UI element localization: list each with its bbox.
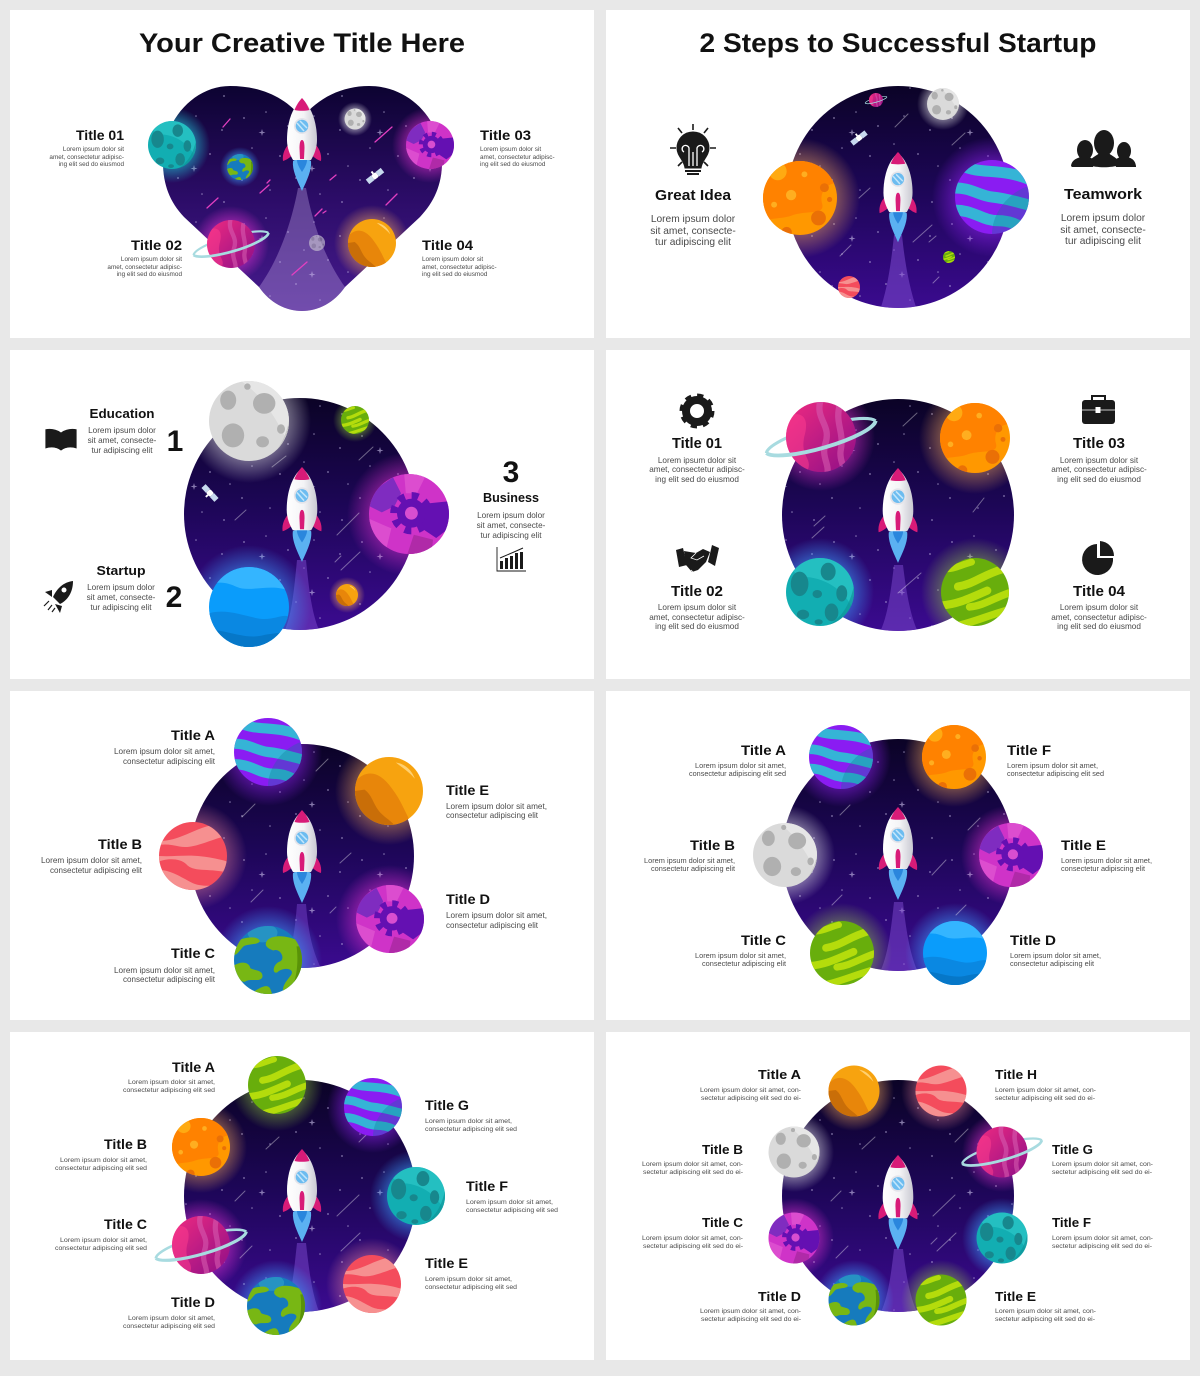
text: Title F: Title F <box>1007 742 1051 758</box>
text: Title B: Title B <box>98 836 142 852</box>
rocket <box>283 1149 321 1242</box>
text: Title 04: ing elit sed do eiusmod <box>1057 622 1141 631</box>
text: Title C: Lorem ipsum dolor sit amet, <box>695 953 786 960</box>
text: Title B: consectetur adipiscing elit <box>651 866 735 873</box>
text: Title 04 <box>422 237 497 278</box>
text: Title E: sectetur adipiscing elit sed do ei- <box>995 1316 1095 1323</box>
text: Title B: sectetur adipiscing elit sed do ei- <box>643 1169 743 1176</box>
panel: 6 titles <box>606 691 1190 1020</box>
planet: small amber <box>336 584 358 606</box>
panel: 3 steps Education Startup Business <box>10 350 594 679</box>
text: Title G <box>1052 1142 1153 1176</box>
text: Education: Education <box>90 406 155 421</box>
planet: red <box>343 1255 401 1314</box>
text: Title D: Title D <box>171 1295 215 1310</box>
icon: team <box>1071 130 1136 167</box>
text: Title 04 <box>1051 583 1147 631</box>
text: Title 02: amet, consectetur adipisc- <box>649 613 745 622</box>
text: Title 03: Lorem ipsum dolor sit <box>480 146 541 153</box>
planet: orange <box>763 161 837 237</box>
text: Title D: sectetur adipiscing elit sed do ei- <box>701 1316 801 1323</box>
text: Great Idea: Great Idea <box>655 187 732 204</box>
planet: moon <box>753 823 817 887</box>
text: Title A <box>123 1060 215 1094</box>
planet: gear <box>369 474 449 554</box>
text: Title D: Title D <box>446 891 490 907</box>
text: Great Idea: sit amet, consecte- <box>650 226 736 237</box>
text: Teamwork: sit amet, consecte- <box>1060 225 1146 236</box>
circular space scene <box>184 398 409 630</box>
planet: small ringed <box>865 92 887 108</box>
planet: teal <box>148 121 196 169</box>
text: Title 03: ing elit sed do eiusmod <box>480 161 546 168</box>
number 2: 2 <box>166 581 182 614</box>
text: Title D: Title D <box>1010 932 1056 948</box>
text: Title D <box>1010 932 1101 968</box>
planet: gear <box>979 823 1043 887</box>
number 1: 1 <box>167 425 183 458</box>
text: Title F: Lorem ipsum dolor sit amet, <box>466 1199 553 1206</box>
text: Title 01: Title 01 <box>672 435 722 452</box>
planet: moon <box>344 108 366 130</box>
text: Title 02: amet, consectetur adipisc- <box>107 264 182 271</box>
circular space scene <box>782 1080 1014 1312</box>
text: Title G: sectetur adipiscing elit sed do ei- <box>1052 1169 1152 1176</box>
text: Teamwork <box>1060 186 1146 247</box>
planet: teal <box>786 558 854 626</box>
planet: small green <box>943 251 955 263</box>
panel: 4 titles with icons <box>606 350 1190 679</box>
text: Title A: Lorem ipsum dolor sit amet, <box>695 763 786 770</box>
rocket <box>282 467 322 562</box>
text: Title 03: amet, consectetur adipisc- <box>480 154 555 161</box>
text: Title 01: amet, consectetur adipisc- <box>49 154 124 161</box>
text: Title A <box>700 1067 802 1102</box>
planet: orange <box>922 725 986 791</box>
circular space scene <box>184 1080 412 1312</box>
text: Title A: sectetur adipiscing elit sed do ei- <box>701 1095 801 1102</box>
text: Title 03: Title 03 <box>1073 435 1125 452</box>
planet: moon <box>209 381 289 461</box>
text: Title 04: ing elit sed do eiusmod <box>422 271 488 278</box>
icon: gear <box>682 396 712 426</box>
text: Title D: Lorem ipsum dolor sit amet, <box>446 911 547 920</box>
panel: 5 titles <box>10 691 594 1020</box>
text: Title E <box>1061 837 1152 873</box>
planet: earth <box>227 153 253 180</box>
text: Title 04: Title 04 <box>1073 583 1126 600</box>
rocket <box>283 98 321 191</box>
title: Your Creative Title Here <box>139 28 465 58</box>
text: Business: Lorem ipsum dolor <box>477 511 545 520</box>
text: Title F <box>1007 742 1104 778</box>
text: Title B <box>642 1142 743 1176</box>
text: Title E <box>995 1289 1096 1323</box>
text: Title 03: amet, consectetur adipisc- <box>1051 465 1147 474</box>
text: Startup: Startup <box>96 563 146 578</box>
text: Great Idea: Lorem ipsum dolor <box>651 214 736 225</box>
text: Title A: Lorem ipsum dolor sit amet, con- <box>700 1087 801 1094</box>
icon: satellite <box>364 166 384 184</box>
text: Title A: Title A <box>758 1067 802 1082</box>
planet: ringed pink <box>766 398 876 476</box>
text: Title 02: ing elit sed do eiusmod <box>655 622 739 631</box>
text: Title G: Title G <box>1052 1142 1093 1157</box>
text: Title 04: amet, consectetur adipisc- <box>422 264 497 271</box>
text: Title C: consectetur adipiscing elit <box>702 961 786 968</box>
icon: handshake <box>676 545 719 573</box>
text: Title 01: Title 01 <box>76 127 124 143</box>
text: Title H <box>995 1067 1096 1102</box>
planet: gear <box>406 121 454 169</box>
text: Title E: Title E <box>1061 837 1106 853</box>
text: Great Idea: tur adipiscing elit <box>655 237 731 248</box>
text: Title F <box>466 1179 558 1214</box>
text: Title B: Title B <box>690 837 735 853</box>
text: Title C: consectetur adipiscing elit <box>123 975 216 984</box>
text: Title C: Title C <box>741 932 786 948</box>
panel: 7 titles <box>10 1032 594 1360</box>
icon: rocket <box>44 581 73 613</box>
icon: pie chart <box>1082 541 1114 575</box>
text: Business <box>477 490 546 540</box>
text: Title E: consectetur adipiscing elit <box>1061 866 1145 873</box>
text: Title A: Lorem ipsum dolor sit amet, <box>114 747 215 756</box>
text: Title 01 <box>49 127 124 168</box>
text: Title F: sectetur adipiscing elit sed do ei- <box>1052 1243 1152 1250</box>
text: Title B: Lorem ipsum dolor sit amet, <box>60 1157 147 1164</box>
text: Title 03: ing elit sed do eiusmod <box>1057 475 1141 484</box>
planet: green <box>248 1056 308 1114</box>
planet: green <box>916 1274 969 1326</box>
text: Title 01: Lorem ipsum dolor sit <box>63 146 124 153</box>
text: Title B <box>55 1137 147 1172</box>
planet: ringed pink <box>194 218 268 271</box>
rocket <box>878 468 918 563</box>
text: Title D: consectetur adipiscing elit <box>446 921 539 930</box>
text: Title B: Title B <box>104 1137 147 1152</box>
text: Title C: Lorem ipsum dolor sit amet, con- <box>642 1235 743 1242</box>
text: Title C: sectetur adipiscing elit sed do ei- <box>643 1243 743 1250</box>
text: Startup <box>87 563 156 612</box>
text: Title E: Title E <box>425 1256 468 1271</box>
text: Title E <box>425 1256 517 1291</box>
text: Title E: Lorem ipsum dolor sit amet, <box>425 1276 512 1283</box>
text: Title 04: Lorem ipsum dolor sit <box>422 256 483 263</box>
text: Title 02: ing elit sed do eiusmod <box>117 271 182 278</box>
planet: striped purple <box>951 160 1033 234</box>
text: Title C: Title C <box>104 1217 147 1232</box>
text: Title E: Lorem ipsum dolor sit amet, <box>1061 858 1152 865</box>
text: Business: tur adipiscing elit <box>481 531 542 540</box>
text: Title G: Lorem ipsum dolor sit amet, <box>425 1118 512 1125</box>
text: Title E <box>446 782 547 820</box>
text: Title C <box>642 1215 744 1250</box>
planet: green <box>941 558 1012 626</box>
planet: red <box>916 1066 966 1118</box>
icon: open book <box>45 428 77 451</box>
text: Title 01: Lorem ipsum dolor sit <box>658 456 737 465</box>
text: Title D <box>700 1289 801 1323</box>
planet: earth <box>234 923 302 994</box>
text: Title B: consectetur adipiscing elit <box>50 866 143 875</box>
planet: teal <box>976 1212 1028 1264</box>
text: Title F: Title F <box>466 1179 508 1194</box>
text: Title D: consectetur adipiscing elit <box>1010 961 1094 968</box>
text: Title D: consectetur adipiscing elit sed <box>123 1323 215 1330</box>
text: Title G: consectetur adipiscing elit sed <box>425 1126 517 1133</box>
text: Title G <box>425 1098 517 1133</box>
text: Title E: Lorem ipsum dolor sit amet, con- <box>995 1308 1096 1315</box>
text: Title A: consectetur adipiscing elit <box>123 757 216 766</box>
rocket <box>879 152 917 242</box>
text: Title A <box>114 727 216 766</box>
circular space scene <box>195 744 414 968</box>
text: Title 03 <box>1051 435 1147 484</box>
planet: striped purple <box>806 725 876 789</box>
text: Title A: Lorem ipsum dolor sit amet, <box>128 1079 215 1086</box>
text: Title 01: ing elit sed do eiusmod <box>59 161 124 168</box>
text: Title 02: Title 02 <box>671 583 723 600</box>
text: Title 02 <box>649 583 745 631</box>
text: Title B: consectetur adipiscing elit sed <box>55 1165 147 1172</box>
planet: earth <box>247 1275 305 1335</box>
planet: amber <box>828 1066 880 1116</box>
text: Title A: consectetur adipiscing elit sed <box>689 771 786 778</box>
text: Title A <box>689 742 786 778</box>
text: Title A: Title A <box>172 1060 215 1075</box>
text: Title D: Lorem ipsum dolor sit amet, <box>128 1315 215 1322</box>
text: Title 02: Lorem ipsum dolor sit <box>121 256 182 263</box>
circular space scene <box>782 399 1014 631</box>
planet: striped purple <box>231 718 305 786</box>
text: Education: tur adipiscing elit <box>92 446 153 455</box>
text: Title C: consectetur adipiscing elit sed <box>55 1245 147 1252</box>
planet: orange <box>940 403 1010 475</box>
text: Teamwork: tur adipiscing elit <box>1065 236 1141 247</box>
planet: orange <box>172 1118 230 1178</box>
text: Title G: Title G <box>425 1098 469 1113</box>
text: Title C <box>55 1217 147 1252</box>
planet: amber <box>355 757 423 825</box>
text: Education <box>88 406 157 455</box>
planet: amber <box>348 219 396 267</box>
planet: ringed pink <box>156 1213 246 1277</box>
text: Title 03 <box>480 127 555 168</box>
planet: blue <box>209 567 289 647</box>
heart space scene <box>163 86 442 311</box>
text: Title F: consectetur adipiscing elit sed <box>466 1207 558 1214</box>
text: Title D: Title D <box>758 1289 801 1304</box>
text: Title 02: Title 02 <box>131 237 182 253</box>
number 3: 3 <box>503 456 519 489</box>
text: Title E: consectetur adipiscing elit <box>446 811 539 820</box>
text: Title C <box>114 945 216 984</box>
text: Title F: Title F <box>1052 1215 1091 1230</box>
text: Title B <box>41 836 143 875</box>
text: Title C: Title C <box>171 945 215 961</box>
text: Title E: consectetur adipiscing elit sed <box>425 1284 517 1291</box>
text: Title C: Lorem ipsum dolor sit amet, <box>60 1237 147 1244</box>
text: Title C: Title C <box>702 1215 744 1230</box>
text: Education: Lorem ipsum dolor <box>88 426 156 435</box>
text: Title 03: Title 03 <box>480 127 531 143</box>
icon: satellite <box>849 128 868 146</box>
planet: ringed pink <box>962 1124 1042 1181</box>
title: 2 Steps to Successful Startup <box>700 28 1096 58</box>
planet: striped purple <box>341 1078 405 1136</box>
text: Title D: Lorem ipsum dolor sit amet, con- <box>700 1308 801 1315</box>
text: Title 04: amet, consectetur adipisc- <box>1051 613 1147 622</box>
planet: moon <box>768 1126 820 1178</box>
icon: light bulb <box>670 124 716 174</box>
text: Great Idea <box>650 187 736 248</box>
text: Title E: Title E <box>446 782 489 798</box>
text: Title B: Title B <box>702 1142 743 1157</box>
planet: teal <box>387 1167 445 1225</box>
panel: 8 titles <box>606 1032 1190 1360</box>
text: Title D <box>123 1295 215 1330</box>
text: Title 03: Lorem ipsum dolor sit <box>1060 456 1139 465</box>
text: Title 04: Lorem ipsum dolor sit <box>1060 603 1139 612</box>
circular space scene <box>786 739 1010 971</box>
circular space scene <box>792 86 1004 308</box>
text: Title F: consectetur adipiscing elit sed <box>1007 771 1104 778</box>
icon: satellite <box>199 483 219 505</box>
planet: red <box>838 276 860 298</box>
text: Title F <box>1052 1215 1153 1250</box>
text: Startup: sit amet, consecte- <box>87 593 156 602</box>
planet: green <box>341 406 370 434</box>
asteroid <box>309 235 325 251</box>
text: Title 01 <box>649 435 745 484</box>
text: Title B <box>644 837 735 873</box>
text: Title B: Lorem ipsum dolor sit amet, <box>644 858 735 865</box>
rocket <box>283 810 321 903</box>
text: Title H: sectetur adipiscing elit sed do ei- <box>995 1095 1095 1102</box>
text: Title C: Lorem ipsum dolor sit amet, <box>114 966 215 975</box>
text: Title G: Lorem ipsum dolor sit amet, con- <box>1052 1161 1153 1168</box>
rocket <box>879 807 917 900</box>
text: Startup: Lorem ipsum dolor <box>87 583 155 592</box>
text: Title F: Lorem ipsum dolor sit amet, con- <box>1052 1235 1153 1242</box>
text: Title B: Lorem ipsum dolor sit amet, <box>41 856 142 865</box>
text: Teamwork: Lorem ipsum dolor <box>1061 213 1146 224</box>
planet: earth <box>828 1272 880 1326</box>
text: Title F: Lorem ipsum dolor sit amet, <box>1007 763 1098 770</box>
text: Business: sit amet, consecte- <box>477 521 546 530</box>
icon: briefcase <box>1082 396 1115 424</box>
icon: bar chart <box>497 547 526 571</box>
planet: green <box>810 921 877 985</box>
text: Title E: Lorem ipsum dolor sit amet, <box>446 802 547 811</box>
text: Title D: Lorem ipsum dolor sit amet, <box>1010 953 1101 960</box>
panel: 2 Steps to Successful Startup <box>606 10 1190 338</box>
text: Title E: Title E <box>995 1289 1036 1304</box>
planet: blue <box>923 921 987 985</box>
planet: moon <box>927 88 959 120</box>
text: Business: Business <box>483 490 539 505</box>
text: Title A: consectetur adipiscing elit sed <box>123 1087 215 1094</box>
text: Title 01: amet, consectetur adipisc- <box>649 465 745 474</box>
planet: gear <box>768 1212 820 1264</box>
text: Title B: Lorem ipsum dolor sit amet, con- <box>642 1161 743 1168</box>
text: Title C <box>695 932 786 968</box>
text: Title A: Title A <box>171 727 215 743</box>
text: Title 02: Lorem ipsum dolor sit <box>658 603 737 612</box>
planet: red <box>159 822 227 891</box>
text: Startup: tur adipiscing elit <box>91 603 152 612</box>
text: Education: sit amet, consecte- <box>88 436 157 445</box>
panel: Your Creative Title Here <box>10 10 594 338</box>
planet: gear <box>356 885 424 953</box>
text: Title D <box>446 891 547 930</box>
text: Title H: Lorem ipsum dolor sit amet, con- <box>995 1087 1096 1094</box>
text: Teamwork: Teamwork <box>1064 186 1143 203</box>
text: Title H: Title H <box>995 1067 1037 1082</box>
text: Title 02 <box>107 237 182 278</box>
text: Title A: Title A <box>741 742 786 758</box>
text: Title 01: ing elit sed do eiusmod <box>655 475 739 484</box>
text: Title 04: Title 04 <box>422 237 473 253</box>
rocket <box>878 1155 918 1250</box>
